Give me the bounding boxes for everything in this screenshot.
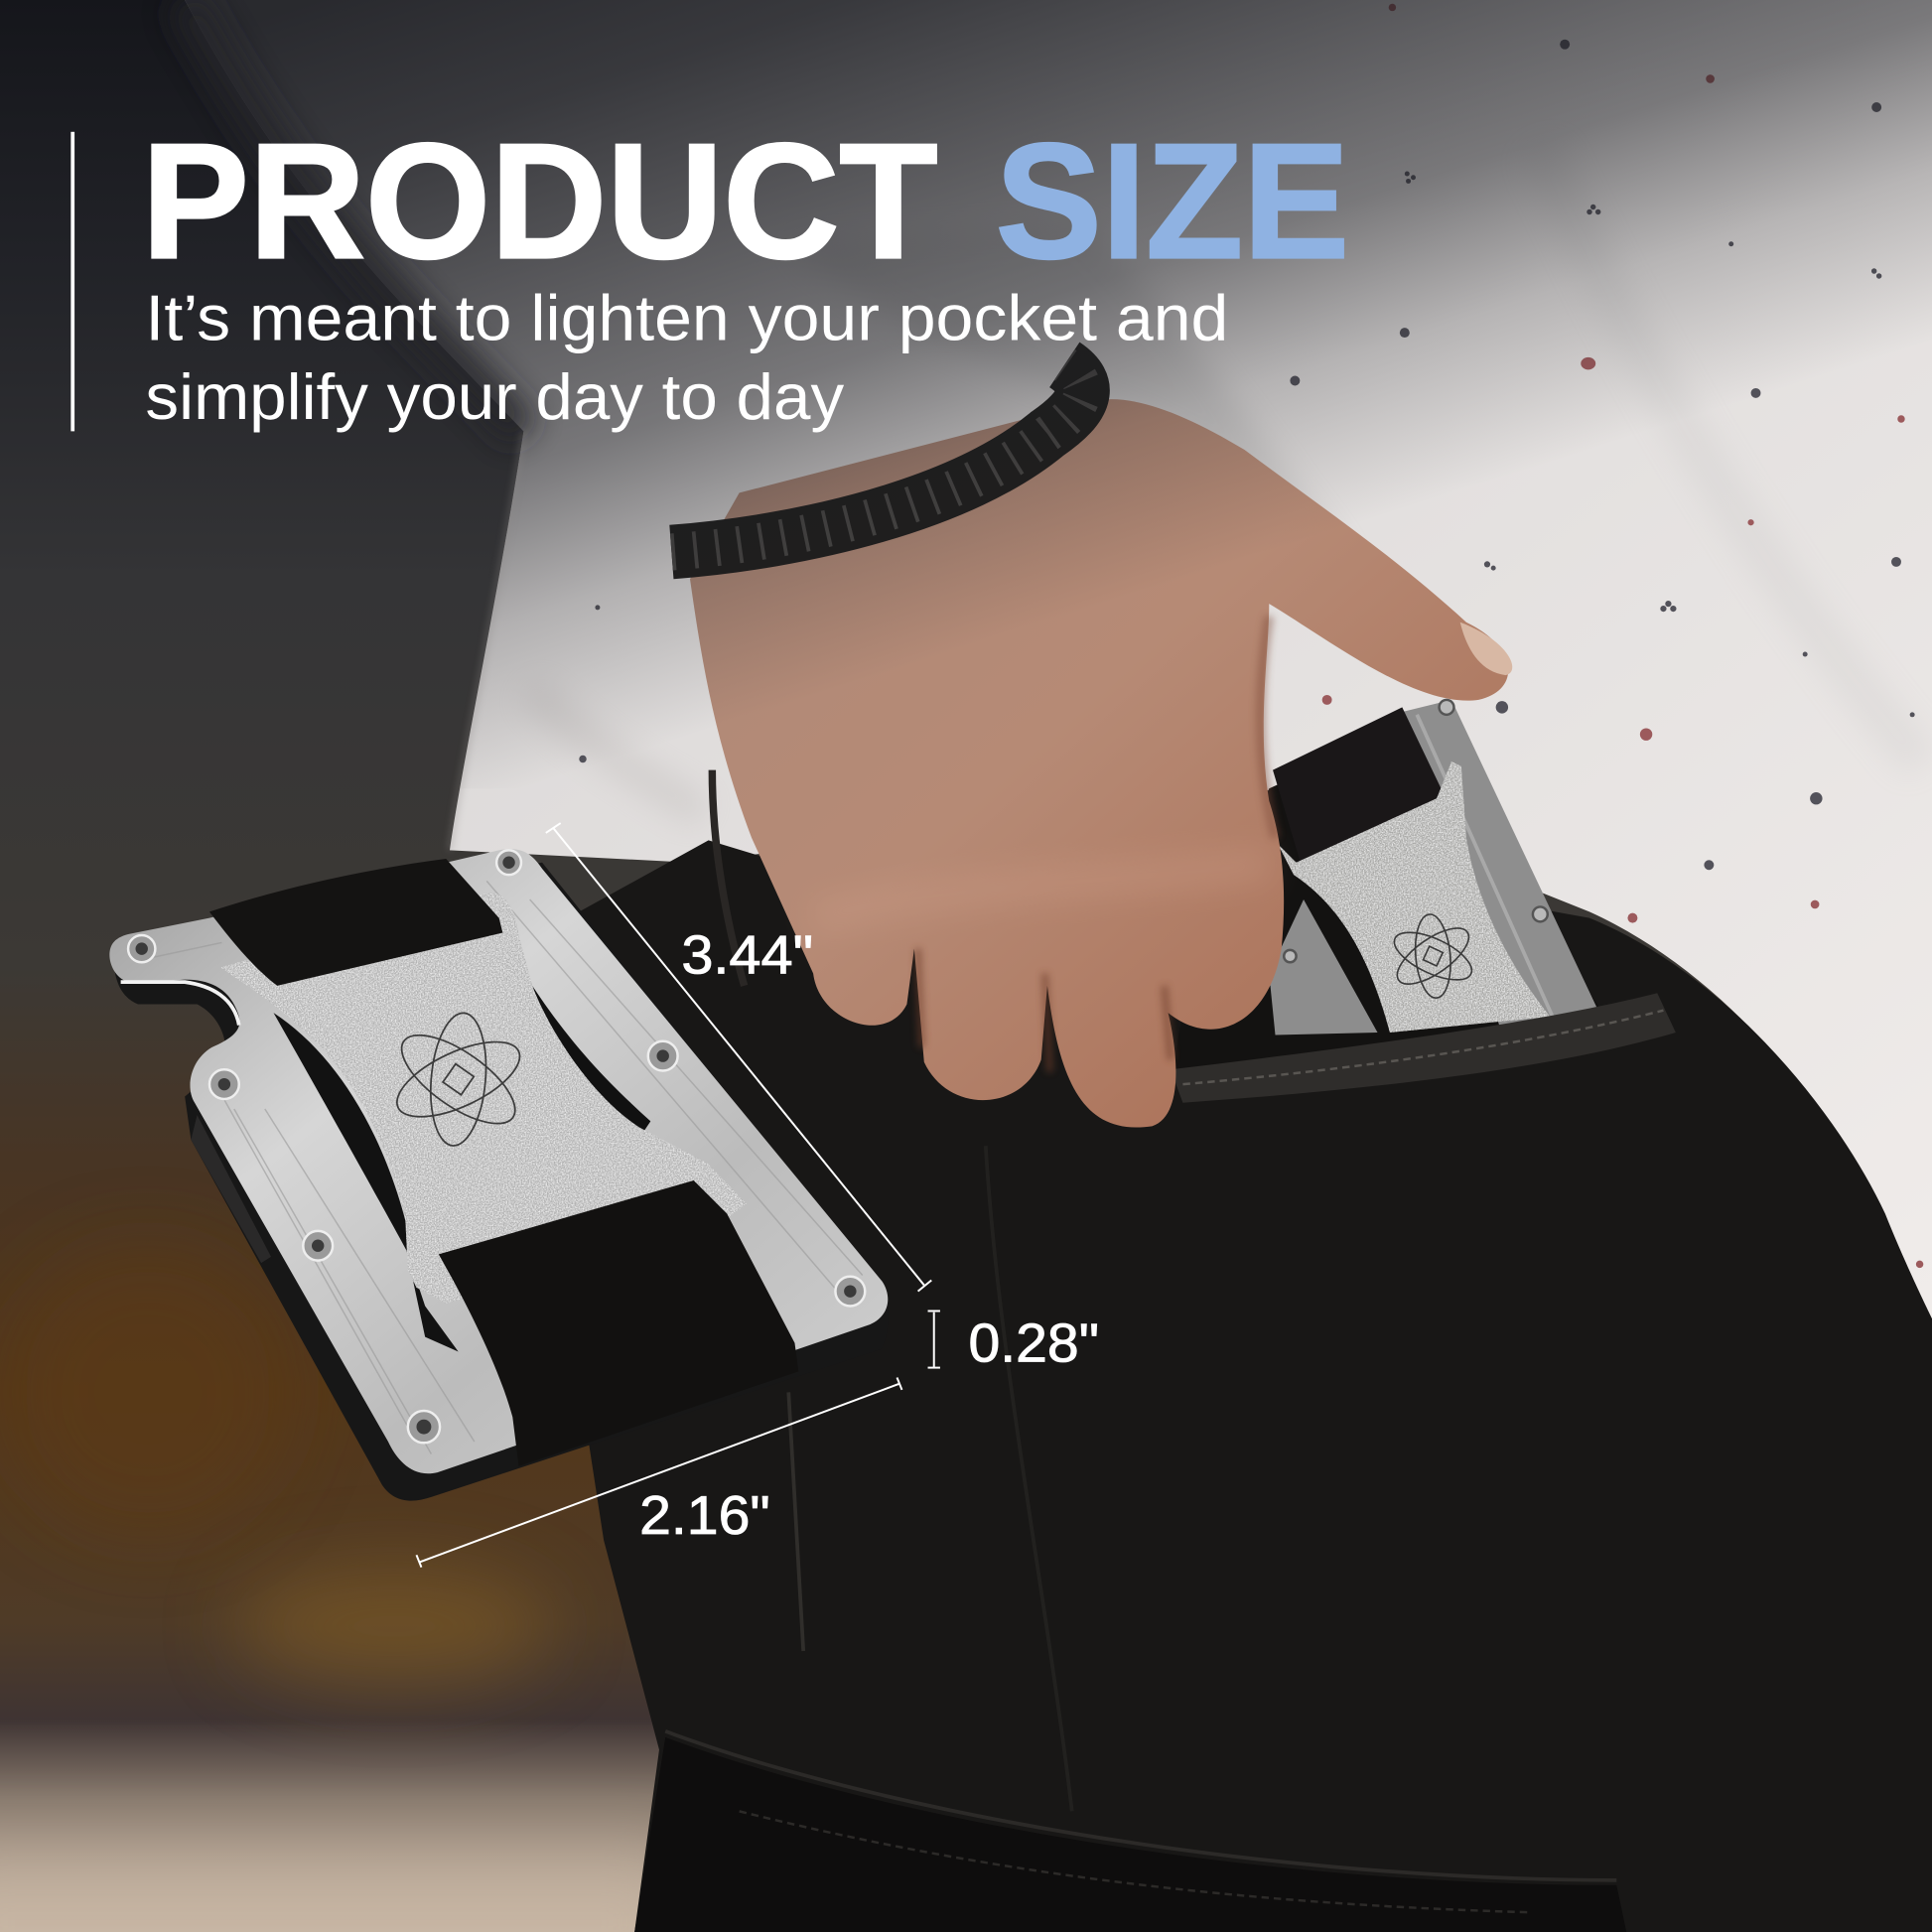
- elastic bottom: [439, 1180, 798, 1466]
- dark pocket interior: [1171, 727, 1601, 1084]
- atom logo: [363, 983, 554, 1175]
- shirt: [185, 0, 1932, 1330]
- left aluminium rail: [1269, 899, 1378, 1035]
- wallet product: [109, 849, 889, 1501]
- money clip: [1278, 761, 1550, 1033]
- title: SIZE: [996, 109, 1349, 292]
- subtitle: It’s meant to lighten your pocket and: [145, 283, 1228, 354]
- dimension: thickness line: [928, 1311, 940, 1368]
- wallet black side: [113, 863, 889, 1501]
- pants: [579, 840, 1932, 1932]
- subtitle: simplify your day to day: [145, 361, 845, 433]
- dimension: width line: [416, 1378, 901, 1568]
- dimension: thickness label: 0.28": [968, 1312, 1099, 1373]
- brushed lines: [136, 881, 863, 1453]
- shading overlays: [0, 0, 1932, 850]
- subtitle: [145, 283, 1228, 433]
- side elastic: [191, 1115, 271, 1263]
- atom logo small: [1376, 897, 1490, 1015]
- title bar: [70, 132, 74, 431]
- crescent cutouts: [274, 1013, 459, 1351]
- elastic band: [1273, 707, 1445, 865]
- title: [142, 109, 1349, 292]
- drawstring: [712, 770, 745, 986]
- hand: [690, 399, 1512, 1128]
- wallet in pocket: [1171, 700, 1601, 1084]
- hook highlight: [121, 982, 239, 1026]
- elastic top: [209, 859, 502, 986]
- wallet aluminium plate: [109, 849, 888, 1473]
- screws: [128, 850, 865, 1443]
- shirt print dots: [579, 4, 1923, 1268]
- dimension: width label: 2.16": [639, 1485, 770, 1546]
- money clip: [220, 893, 747, 1304]
- back pocket flap: [634, 1731, 1626, 1932]
- title: PRODUCT: [142, 109, 937, 292]
- screws: [1284, 700, 1548, 962]
- right aluminium rail: [1401, 700, 1599, 1031]
- bracelet: [671, 364, 1082, 552]
- pocket edge: [1171, 993, 1676, 1103]
- dimension: length line: [546, 823, 931, 1292]
- dimension: length label: 3.44": [681, 924, 813, 985]
